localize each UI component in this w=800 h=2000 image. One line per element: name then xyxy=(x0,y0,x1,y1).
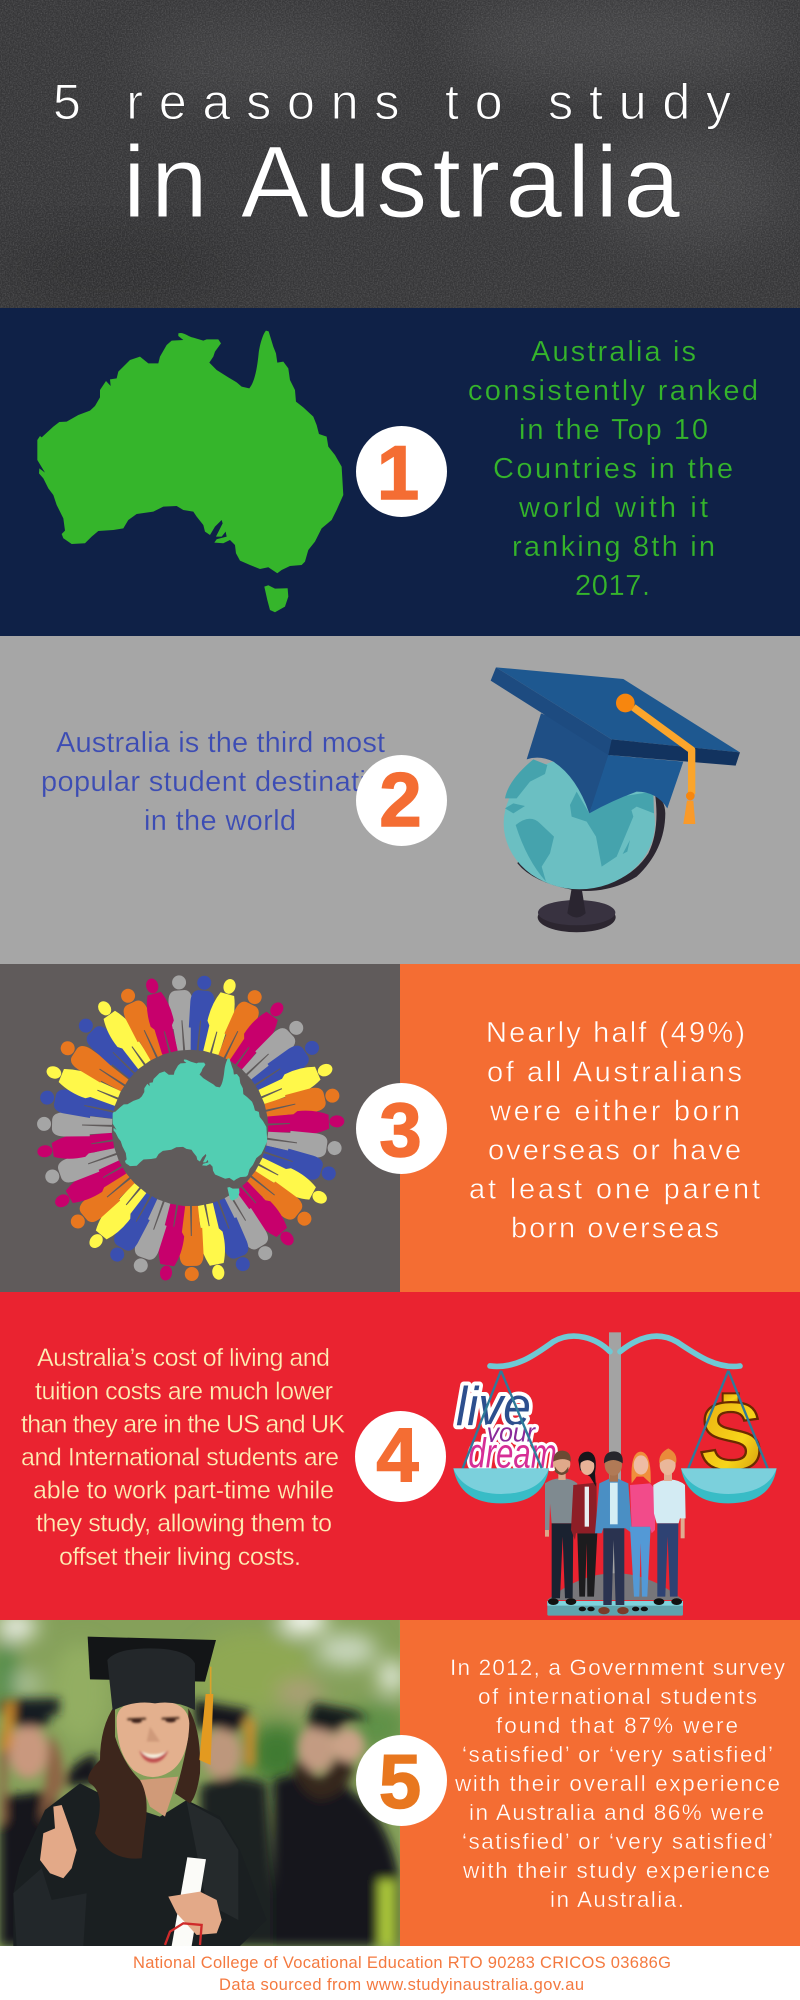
footer xyxy=(0,1946,800,2000)
panel: chalkboard header xyxy=(0,0,800,310)
number badge 4 xyxy=(355,1411,446,1502)
text: reason 5: in Australia. xyxy=(550,1887,684,1912)
footer: National College of Vocational Education RTO 90283 CRICOS 03686G xyxy=(133,1954,671,1972)
text: reason 1: world with it xyxy=(518,492,708,524)
photo background: blurred foliage xyxy=(0,1607,407,1783)
number badge 4: 4 xyxy=(376,1413,419,1498)
text: reason 1 xyxy=(468,336,758,602)
text: reason 5 xyxy=(450,1655,786,1912)
text: reason 4 xyxy=(21,1344,345,1571)
number badge 2: 2 xyxy=(379,758,422,843)
panel: reason 4 xyxy=(0,1292,800,1620)
text: reason 3: overseas or have xyxy=(488,1134,741,1166)
text: reason 4: they study, allowing them to xyxy=(36,1510,332,1538)
sticker: live your dream: live xyxy=(456,1375,531,1437)
photo: blurred graduates behind xyxy=(0,1698,400,1946)
photo: facial details xyxy=(128,1718,178,1763)
sticker: live your dream: your xyxy=(485,1418,536,1448)
panel: reason 5 text background xyxy=(400,1620,800,1946)
text: reason 1: consistently ranked xyxy=(468,375,758,407)
icon: dollar coin letter: S xyxy=(699,1383,763,1490)
panel: reason 1 xyxy=(0,308,800,636)
number badge 1: 1 xyxy=(377,431,419,516)
title xyxy=(53,74,731,239)
figure: man in gray sweater xyxy=(545,1451,577,1605)
text: reason 3: born overseas xyxy=(511,1212,719,1244)
icon: green Australia map xyxy=(37,331,343,612)
figure: woman in maroon jacket xyxy=(571,1452,597,1611)
text: reason 5: with their overall experience xyxy=(454,1771,780,1796)
text: reason 5: In 2012, a Government survey xyxy=(450,1655,786,1680)
panel: reason 2 xyxy=(0,636,800,964)
text: reason 2 xyxy=(41,727,399,837)
photo: main graduate xyxy=(13,1637,267,1946)
figure: woman in pink top xyxy=(630,1452,656,1611)
title: 5 reasons to study xyxy=(53,74,731,130)
text: reason 1: in the Top 10 xyxy=(519,414,708,446)
icon: balance scale with people xyxy=(453,1332,777,1616)
figure: man in light shirt xyxy=(653,1448,686,1605)
text: reason 4: and International students are xyxy=(21,1444,339,1472)
chart: ring of people around Australia xyxy=(36,975,345,1282)
sticker: live your dream xyxy=(456,1375,557,1476)
text: reason 3: of all Australians xyxy=(487,1056,742,1088)
number badge 3 xyxy=(356,1083,447,1174)
text: reason 2: popular student destination xyxy=(41,766,399,798)
text: reason 3: were either born xyxy=(489,1096,740,1128)
title: in Australia xyxy=(123,125,680,239)
text: reason 2: in the world xyxy=(144,805,296,837)
number badge 1 xyxy=(356,426,447,517)
number badge 5 xyxy=(356,1735,447,1826)
sticker: live your dream: dream xyxy=(468,1429,557,1476)
text: reason 4: Australia’s cost of living and xyxy=(37,1344,330,1372)
text: reason 5: found that 87% were xyxy=(496,1713,738,1738)
text: reason 3: at least one parent xyxy=(469,1174,760,1206)
text: reason 1: Australia is xyxy=(531,336,696,368)
number badge 3: 3 xyxy=(379,1088,422,1173)
text: reason 5: in Australia and 86% were xyxy=(469,1800,764,1825)
text: reason 1: ranking 8th in xyxy=(512,531,715,563)
text: reason 3 xyxy=(469,1017,760,1244)
figure: man in blue jacket xyxy=(595,1451,632,1614)
panel: reason 5 photo xyxy=(0,1607,407,1946)
text: reason 4: able to work part-time while xyxy=(33,1477,334,1505)
footer: Data sourced from www.studyinaustralia.gov.au xyxy=(219,1976,584,1994)
text: reason 4: than they are in the US and UK xyxy=(21,1410,345,1438)
icon: globe with graduation cap xyxy=(491,667,740,932)
text: reason 5: ‘satisfied’ or ‘very satisfied’ xyxy=(462,1829,773,1854)
text: reason 5: with their study experience xyxy=(462,1858,770,1883)
panel: reason 3 right xyxy=(400,964,800,1292)
number badge 2 xyxy=(356,755,447,846)
text: reason 4: offset their living costs. xyxy=(59,1543,301,1571)
text: reason 3: Nearly half (49%) xyxy=(486,1017,745,1049)
number badge 5: 5 xyxy=(379,1740,421,1825)
text: reason 1: Countries in the xyxy=(493,453,733,485)
text: reason 5: ‘satisfied’ or ‘very satisfied’ xyxy=(462,1742,773,1767)
text: reason 2: Australia is the third most xyxy=(56,727,385,759)
panel: reason 3 left xyxy=(0,964,400,1292)
text: reason 5: of international students xyxy=(478,1684,757,1709)
text: reason 1: 2017. xyxy=(575,570,650,602)
text: reason 4: tuition costs are much lower xyxy=(35,1377,333,1405)
